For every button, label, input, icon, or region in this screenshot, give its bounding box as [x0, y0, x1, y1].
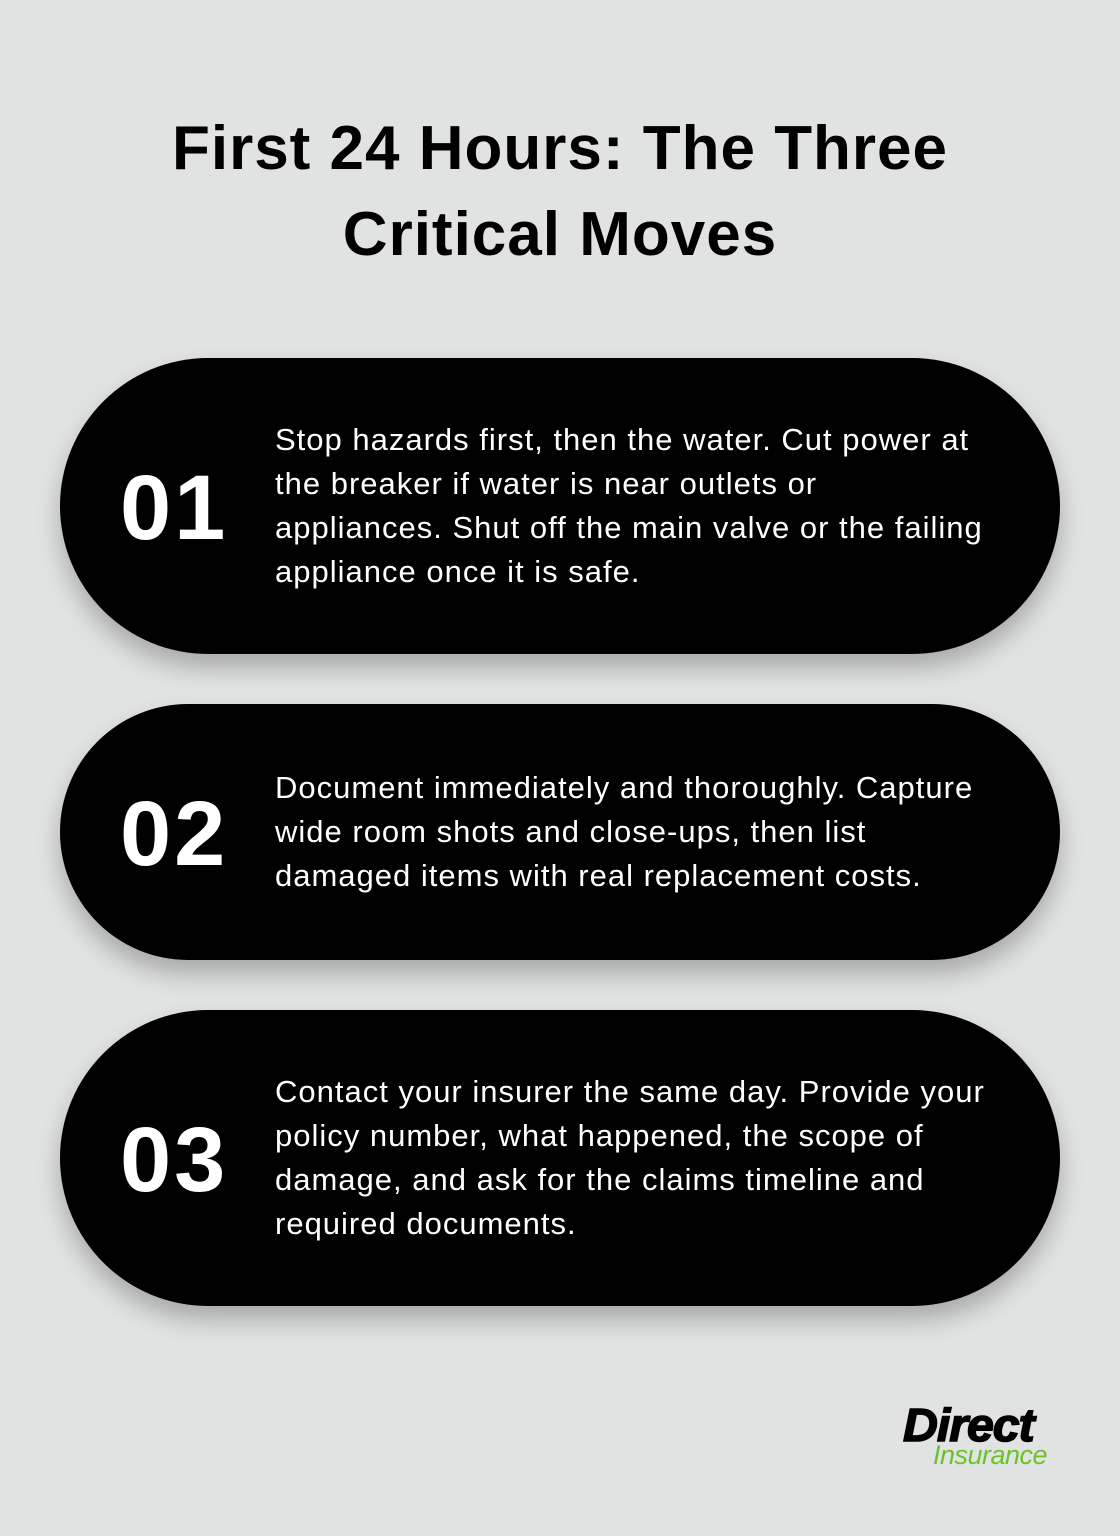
text 2: wide room shots and close-ups, then list	[275, 814, 866, 849]
title: First 24 Hours: The Three	[172, 114, 948, 183]
text 3: damage, and ask for the claims timeline and	[275, 1162, 925, 1197]
text 2	[275, 770, 973, 893]
title: Critical Moves	[343, 200, 777, 269]
card 1	[60, 358, 1060, 654]
logo: Insurance	[933, 1440, 1047, 1470]
text 3: Contact your insurer the same day. Provide your	[275, 1074, 985, 1109]
logo: Direct	[903, 1399, 1034, 1451]
card 3	[60, 1010, 1060, 1306]
logo	[902, 1399, 1047, 1470]
text 1: appliance once it is safe.	[275, 554, 640, 589]
number 02: 02	[120, 783, 228, 885]
text 1: Stop hazards first, then the water. Cut power at	[275, 422, 969, 457]
number 03: 03	[120, 1109, 228, 1211]
text 2: Document immediately and thoroughly. Capture	[275, 770, 973, 805]
title	[172, 114, 948, 269]
text 1: appliances. Shut off the main valve or the failing	[275, 510, 983, 545]
text 3	[275, 1074, 985, 1241]
card 2	[60, 704, 1060, 960]
text 2: damaged items with real replacement costs.	[275, 858, 922, 893]
text 1	[275, 422, 983, 589]
text 1: the breaker if water is near outlets or	[275, 466, 817, 501]
number 01: 01	[120, 457, 228, 559]
text 3: policy number, what happened, the scope of	[275, 1118, 924, 1153]
text 3: required documents.	[275, 1206, 577, 1241]
